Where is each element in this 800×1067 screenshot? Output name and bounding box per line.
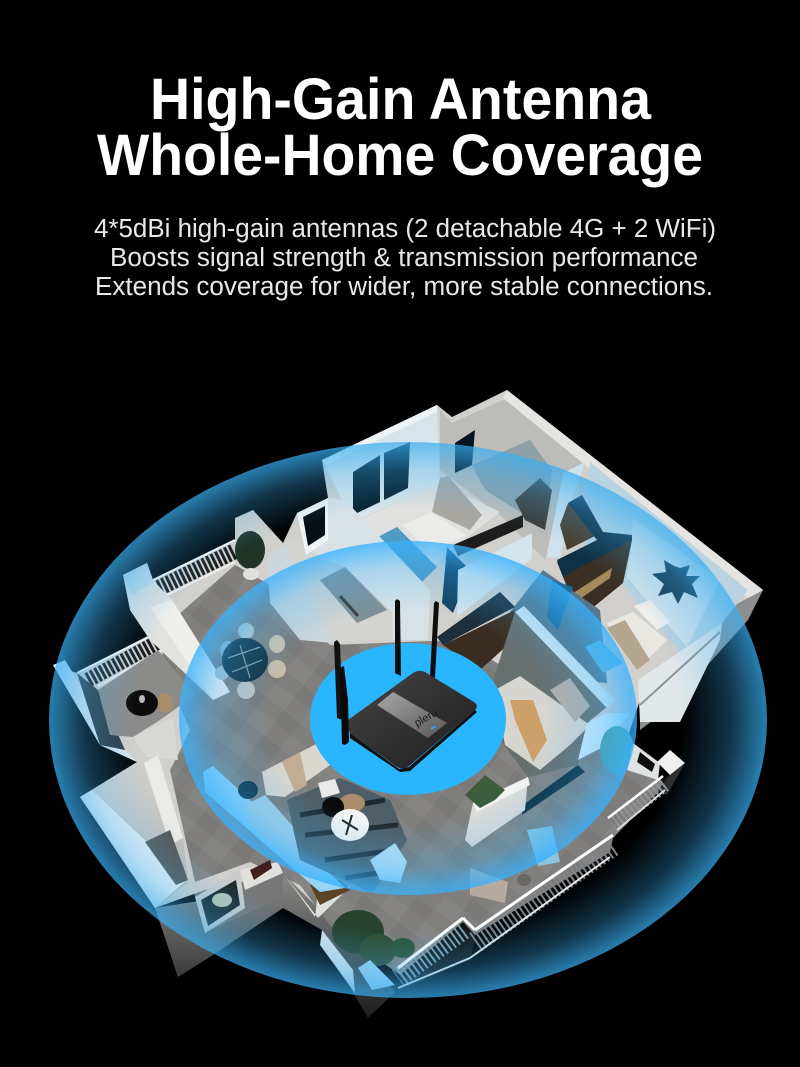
- lower balcony wall: [320, 930, 395, 993]
- potted plant: [235, 531, 265, 580]
- brand label: pleru: [412, 707, 440, 730]
- top right rim wall: [503, 390, 763, 598]
- lower bedroom: [490, 606, 615, 815]
- left table: [126, 690, 173, 716]
- left walls: [53, 563, 230, 762]
- armchairs: [370, 826, 560, 903]
- corner plants: [332, 910, 415, 966]
- entry walls: [240, 860, 352, 918]
- sofa set: [238, 742, 330, 880]
- house floor plan: [53, 390, 763, 1018]
- railing: right: [608, 776, 665, 830]
- outer coverage ellipse: [49, 442, 767, 998]
- title: [97, 67, 703, 188]
- wall by plant: [465, 775, 530, 847]
- right column and plant: [578, 713, 634, 774]
- main tiled floor: [160, 565, 665, 975]
- router: [334, 599, 477, 772]
- railings: [77, 540, 665, 988]
- framed picture: [195, 870, 245, 933]
- exterior shadows: [155, 590, 763, 1018]
- middle coverage ellipse: [179, 541, 637, 895]
- router body: [347, 671, 477, 768]
- left room block: [80, 755, 188, 908]
- bathroom: [440, 398, 590, 560]
- silver panel: [377, 692, 447, 738]
- title: Whole-Home Coverage: [97, 123, 703, 188]
- railing: bottom corner: [398, 918, 475, 988]
- description text: Boosts signal strength & transmission performance: [110, 244, 698, 272]
- coffee tables: [318, 779, 369, 841]
- railing: top left: [153, 540, 235, 596]
- lower wardrobe: [437, 592, 515, 670]
- right bedroom bed and sofa: [585, 600, 722, 722]
- antenna: rear right: [430, 601, 439, 678]
- wardrobe: [510, 495, 632, 683]
- antenna: left back: [334, 640, 343, 720]
- description text: 4*5dBi high-gain antennas (2 detachable 4G + 2 WiFi): [94, 215, 716, 243]
- router front edge: [350, 710, 477, 772]
- house outer walls: [53, 390, 763, 960]
- description text: [94, 215, 716, 301]
- antenna: rear left: [395, 599, 401, 676]
- inner coverage ellipse: [310, 643, 506, 795]
- railing: left: [77, 632, 162, 686]
- LED: [431, 726, 436, 730]
- description text: Extends coverage for wider, more stable connections.: [95, 273, 713, 301]
- upper bedroom: [355, 476, 500, 590]
- title: High-Gain Antenna: [150, 67, 652, 132]
- antenna: front left: [340, 666, 349, 745]
- rug: [287, 778, 407, 893]
- balcony corner wall: [627, 743, 685, 795]
- right bedroom wall with mirror: [547, 462, 748, 660]
- inner blue wall: [203, 766, 345, 892]
- back wall with windows: [322, 405, 440, 522]
- center walls and TV room: [267, 498, 430, 643]
- railing: bottom: [470, 835, 613, 958]
- dark divider wall: [442, 515, 532, 617]
- dining set: [215, 623, 286, 699]
